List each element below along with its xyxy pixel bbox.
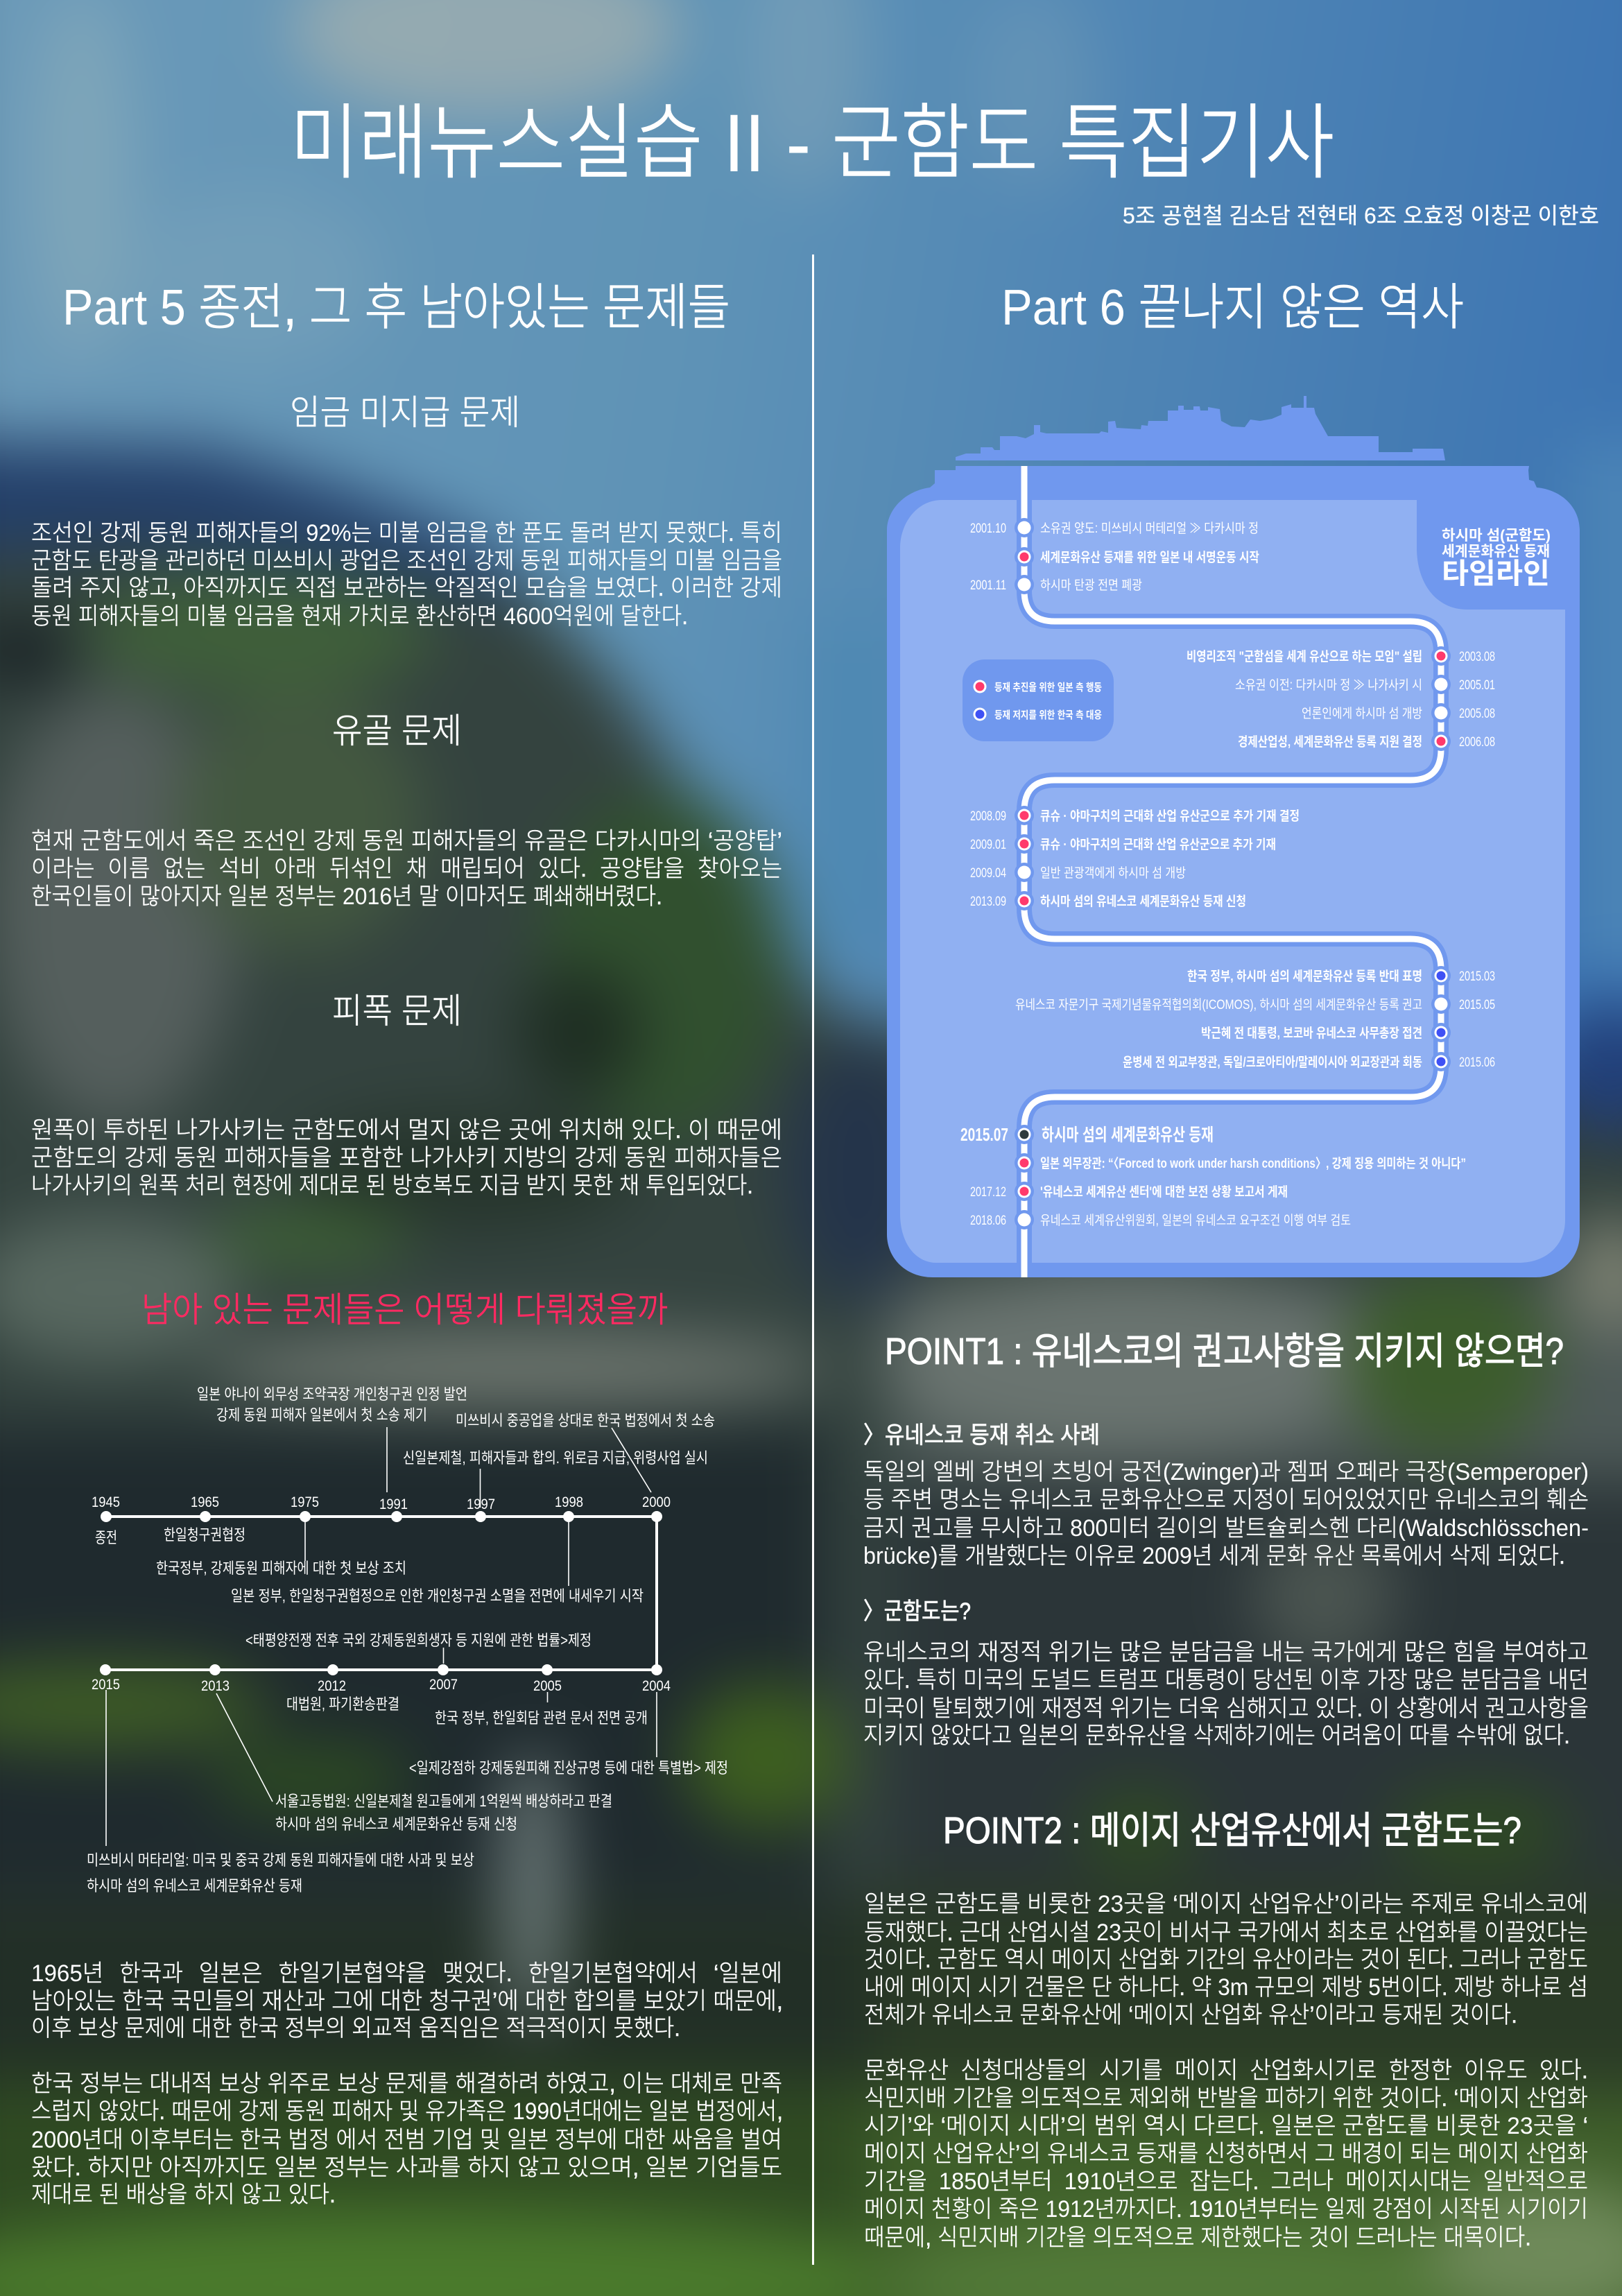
event labels: 하시마 섬의 유네스코 세계문화유산 등재	[87, 1877, 302, 1894]
red heading: 남아 있는 문제들은 어떻게 다뤄졌을까	[141, 1291, 668, 1329]
year labels: 2015	[92, 1677, 120, 1693]
event labels: bold: 큐슈 · 야마구치의 근대화 산업 유산군으로 추가 기재	[1040, 837, 1276, 852]
text block: UNESCO finances: 유네스코의 재정적 위기는 많은 분담금을 내는 국가에게 많은 힘을 부여하고	[863, 1639, 1589, 1666]
event labels: bold: 큐슈 · 야마구치의 근대화 산업 유산군으로 추가 기재 결정	[1040, 809, 1300, 824]
text block: unpaid wages	[31, 520, 782, 630]
panel: part 5 text sections	[31, 393, 782, 1329]
year labels: 2000	[642, 1494, 671, 1510]
date labels: 2009.01	[970, 838, 1006, 852]
subheading: delisting case: 〉유네스코 등재 취소 사례	[863, 1422, 1100, 1449]
subheading: wage: 임금 미지급 문제	[290, 393, 520, 432]
text block: UNESCO finances	[863, 1639, 1589, 1749]
event labels: 서울고등법원: 신일본제철 원고들에게 1억원씩 배상하라고 판결	[275, 1793, 612, 1810]
text block: unpaid wages: 돌려 주지 않고, 아직까지도 직접 보관하는 악질적인 모습을 보였다. 이러한 강제	[31, 575, 782, 601]
text block: period limitation	[864, 2057, 1588, 2251]
date labels: 2015.06	[1459, 1055, 1495, 1070]
year labels: 1975	[291, 1494, 319, 1510]
event labels: bold: 경제산업성, 세계문화유산 등록 지원 결정	[1238, 734, 1422, 750]
heading: point 2: POINT2 : 메이지 산업유산에서 군함도는?	[943, 1810, 1521, 1852]
event labels: bold	[1040, 550, 1466, 1200]
event labels: 종전	[95, 1529, 117, 1546]
event labels: bold: 윤병세 전 외교부장관, 독일/크로아티아/말레이시아 외교장관과 회동	[1123, 1055, 1422, 1070]
route line	[1024, 466, 1441, 1277]
text block: Meiji heritage: 내에 메이지 시기 건물은 단 하나다. 약 3m 규모의 제방 5번이다. 제방 하나로 섬	[864, 1974, 1588, 2001]
text block: period limitation: 메이지 천황이 죽은 1912년까지다. 1910년부터는 일제 강점이 시작된 시기이기	[864, 2196, 1588, 2222]
subheading: radiation: 피폭 문제	[332, 992, 462, 1030]
authors line: 5조 공현철 김소담 전현태 6조 오효정 이창곤 이한호	[1123, 203, 1599, 228]
event labels: regular: 일반 관광객에게 하시마 섬 개방	[1040, 865, 1186, 881]
event labels: bold: 하시마 섬의 유네스코 세계문화유산 등재 신청	[1040, 894, 1246, 909]
text block: period limitation: 기간을 1850년부터 1910년으로 잡는다. 그러나 메이지시대는 일반적으로	[864, 2168, 1588, 2195]
text block: UNESCO finances: 있다. 특히 미국의 도널드 트럼프 대통령이 당선된 이후 가장 많은 분담금을 내던	[863, 1667, 1589, 1693]
text block: period limitation: 때문에, 식민지배 기간을 의도적으로 제한했다는 것이 드러나는 대목이다.	[864, 2225, 1531, 2251]
text block: Meiji heritage: 것이다. 군함도 역시 메이지 산업화 기간의 유산이라는 것이 된다. 그러나 군함도	[864, 1947, 1588, 1973]
text block: 1965 agreement and responses: 제대로 된 배상을 하지 않고 있다.	[31, 2182, 336, 2208]
date labels	[960, 521, 1495, 1228]
date labels: 2005.01	[1459, 678, 1495, 693]
event labels	[87, 1386, 728, 1894]
text block: Meiji heritage: 일본은 군함도를 비롯한 23곳을 ‘메이지 산업유산’이라는 주제로 유네스코에	[864, 1891, 1588, 1917]
event labels: regular	[1015, 521, 1422, 1228]
text block: remains: 이라는 이름 없는 석비 아래 뒤섞인 채 매립되어 있다. 공양탑을 찾아오는	[31, 856, 782, 882]
date labels: 2015.05	[1459, 998, 1495, 1012]
text block: period limitation: 시기’와 ‘메이지 시대’의 범위 역시 다르다. 일본은 군함도를 비롯한 23곳을 ‘	[864, 2113, 1588, 2139]
text block: Meiji heritage: 등재했다. 근대 산업시설 23곳이 비서구 국가에서 최초로 산업화를 이끌었다는	[864, 1919, 1588, 1946]
date labels: 2017.12	[970, 1185, 1006, 1200]
year labels: 1965	[191, 1494, 219, 1510]
year labels: 1998	[555, 1494, 583, 1510]
subheading: Hashima: 〉군함도는?	[863, 1598, 971, 1625]
year labels: 1997	[467, 1496, 495, 1512]
route nodes	[1015, 518, 1451, 1229]
year labels: 2013	[201, 1678, 230, 1694]
date labels: 2006.08	[1459, 735, 1495, 750]
text block: radiation	[31, 1117, 782, 1199]
text block: 1965 agreement and responses: 스럽지 않았다. 때문에 강제 동원 피해자 및 유가족은 1990년대에는 일본 법정에서,	[31, 2098, 783, 2125]
centre divider	[812, 254, 814, 2265]
text block: period limitation: 식민지배 기간을 의도적으로 제외해 반발을 피하기 위한 것이다. ‘메이지 산업화	[864, 2085, 1588, 2112]
year labels: 2012	[318, 1678, 346, 1694]
icon: island silhouette	[956, 396, 1445, 460]
text block: radiation: 나가사키의 원폭 처리 현장에 제대로 된 방호복도 지급 받지 못한 채 투입되었다.	[31, 1173, 753, 1199]
text block: 1965 agreement and responses: 한국 정부는 대내적 보상 위주로 보상 문제를 해결하려 하였고, 이는 대체로 만족	[31, 2071, 782, 2097]
date labels: 2018.06	[970, 1214, 1006, 1228]
date labels: 2001.10	[970, 521, 1006, 536]
year labels: 2005	[533, 1678, 562, 1694]
event labels: <일제강점하 강제동원피해 진상규명 등에 대한 특별법> 제정	[409, 1759, 728, 1777]
text block: unpaid wages: 조선인 강제 동원 피해자들의 92%는 미불 임금을 한 푼도 돌려 받지 못했다. 특히	[31, 520, 782, 546]
heading: part 6: Part 6 끝나지 않은 역사	[1001, 280, 1464, 336]
date labels: 2015.03	[1459, 969, 1495, 984]
event labels: bold: 일본 외무장관: “〈Forced to work under harsh conditions〉, 강제 징용 의미하는 것 아니다”	[1040, 1156, 1466, 1171]
text block: 1965 agreement and responses: 1965년 한국과 일본은 한일기본협약을 맺었다. 한일기본협약에서 ‘일본에	[31, 1960, 782, 1987]
text block: UNESCO finances: 미국이 탈퇴했기에 재정적 위기는 더욱 심해지고 있다. 이 상황에서 권고사항을	[863, 1695, 1589, 1722]
text block: 1965 agreement and responses: 이후 보상 문제에 대한 한국 정부의 외교적 움직임은 적극적이지 못했다.	[31, 2015, 680, 2042]
event labels: 한국정부, 강제동원 피해자에 대한 첫 보상 조치	[156, 1560, 406, 1577]
text block: delisting case: 등 주변 명소는 유네스코 문화유산으로 지정이 되어있었지만 유네스코의 훼손	[863, 1487, 1589, 1513]
year labels	[92, 1494, 671, 1694]
timeline dots	[100, 1511, 662, 1675]
text block: 1965 agreement and responses: 남아있는 한국 국민들의 재산과 그에 대한 청구권’에 대한 합의를 보았기 때문에,	[31, 1988, 783, 2014]
date labels: 2015.07	[960, 1124, 1008, 1145]
event labels: 강제 동원 피해자 일본에서 첫 소송 제기	[216, 1406, 427, 1424]
event labels: 대법원, 파기환송판결	[286, 1695, 399, 1713]
event labels: 일본 야나이 외무성 조약국장 개인청구권 인정 발언	[197, 1386, 467, 1403]
date labels: 2008.09	[970, 809, 1006, 824]
event labels: 신일본제철, 피해자들과 합의. 위로금 지급, 위령사업 실시	[403, 1449, 708, 1467]
text block: radiation: 원폭이 투하된 나가사키는 군함도에서 멀지 않은 곳에 위치해 있다. 이 때문에	[31, 1117, 782, 1143]
event labels: bold: 하시마 섬의 세계문화유산 등재	[1042, 1125, 1214, 1145]
panel: Hashima timeline infographic	[887, 396, 1580, 1277]
panel title	[1442, 528, 1551, 589]
text block: Meiji heritage: 전체가 유네스코 문화유산에 ‘메이지 산업화 유산’이라고 등재된 것이다.	[864, 2002, 1517, 2028]
event labels: regular: 유네스코 세계유산위원회, 일본의 유네스코 요구조건 이행 여부 검토	[1040, 1213, 1351, 1228]
event labels: 미쓰비시 머타리얼: 미국 및 중국 강제 동원 피해자들에 대한 사과 및 보상	[87, 1852, 474, 1869]
event labels: bold: 한국 정부, 하시마 섬의 세계문화유산 등록 반대 표명	[1187, 969, 1422, 984]
text block: 1965 agreement and responses	[31, 1960, 783, 2208]
event labels: bold: 비영리조직 "군함섬을 세계 유산으로 하는 모임" 설립	[1187, 649, 1422, 664]
event labels: bold: 박근혜 전 대통령, 보코바 유네스코 사무총장 접견	[1201, 1026, 1422, 1041]
panel title: 하시마 섬(군함도)	[1442, 528, 1551, 544]
event labels: 일본 정부, 한일청구권협정으로 인한 개인청구권 소멸을 전면에 내세우기 시작	[231, 1587, 644, 1605]
year labels: 1991	[379, 1496, 408, 1512]
text block: period limitation: 메이지 산업유산’의 유네스코 등재를 신청하면서 그 배경이 되는 메이지 산업화	[864, 2141, 1588, 2167]
text block: delisting case	[863, 1459, 1589, 1569]
text block: radiation: 군함도의 강제 동원 피해자들을 포함한 나가사키 지방의 강제 동원 피해자들은	[31, 1145, 782, 1171]
year labels: 2004	[642, 1678, 671, 1694]
year labels: 1945	[92, 1494, 120, 1510]
event labels: bold: '유네스코 세계유산 센터'에 대한 보전 상황 보고서 게재	[1040, 1184, 1288, 1200]
route halo	[1024, 466, 1441, 1277]
event labels: <태평양전쟁 전후 국외 강제동원희생자 등 지원에 관한 법률>제정	[245, 1632, 592, 1649]
text block: Meiji heritage	[864, 1891, 1588, 2028]
date labels: 2013.09	[970, 895, 1006, 909]
timeline track	[106, 1517, 657, 1670]
text block: delisting case: brücke)를 개발했다는 이유로 2009년 세계 문화 유산 목록에서 삭제 되었다.	[863, 1543, 1565, 1569]
panel title: 타임라인	[1442, 558, 1550, 589]
panel title: 세계문화유산 등재	[1442, 544, 1550, 560]
legend: 등재 저지를 위한 한국 측 대응	[994, 709, 1102, 721]
date labels: 2001.11	[970, 578, 1006, 593]
legend: 등재 추진을 위한 일본 측 행동	[994, 682, 1102, 693]
text block: remains	[31, 828, 782, 910]
event labels: regular: 하시마 탄광 전면 폐광	[1040, 578, 1142, 593]
text block: unpaid wages: 동원 피해자들의 미불 임금을 현재 가치로 환산하면 4600억원에 달한다.	[31, 603, 688, 630]
text block: period limitation: 문화유산 신청대상들의 시기를 메이지 산업화시기로 한정한 이유도 있다.	[864, 2057, 1588, 2084]
text block: unpaid wages: 군함도 탄광을 관리하던 미쓰비시 광업은 조선인 강제 동원 피해자들의 미불 임금을	[31, 548, 782, 574]
event labels: 한국 정부, 한일회담 관련 문서 전면 공개	[435, 1709, 648, 1727]
subheading: remains: 유골 문제	[332, 711, 462, 750]
text block: delisting case: 금지 권고를 무시하고 800미터 길이의 발트슐뢰스헨 다리(Waldschlösschen-	[863, 1515, 1589, 1542]
year labels: 2007	[429, 1677, 458, 1693]
event labels: 한일청구권협정	[164, 1526, 245, 1544]
date labels: 2003.08	[1459, 650, 1495, 664]
date labels: 2009.04	[970, 866, 1006, 881]
event labels: 미쓰비시 중공업을 상대로 한국 법정에서 첫 소송	[456, 1412, 715, 1429]
event labels: regular: 소유권 이전: 다카시마 정 ≫ 나가사키 시	[1235, 677, 1422, 693]
date labels: 2005.08	[1459, 707, 1495, 721]
main title: 미래뉴스실습 II - 군함도 특집기사	[290, 98, 1334, 189]
text block: 1965 agreement and responses: 2000년대 이후부터는 한국 법정 에서 전범 기업 및 일본 정부에 대한 싸움을 벌여	[31, 2127, 782, 2153]
event labels: 하시마 섬의 유네스코 세계문화유산 등재 신청	[275, 1815, 517, 1833]
text block: 1965 agreement and responses: 왔다. 하지만 아직까지도 일본 정부는 사과를 하지 않고 있으며, 일본 기업들도	[31, 2155, 782, 2181]
legend	[963, 659, 1114, 741]
event labels: regular: 언론인에게 하시마 섬 개방	[1302, 706, 1422, 721]
panel outer shape	[887, 466, 1580, 1277]
event labels: regular: 소유권 양도: 미쓰비시 머테리얼 ≫ 다카시마 정	[1040, 521, 1259, 536]
text block: delisting case: 독일의 엘베 강변의 츠빙어 궁전(Zwinger)과 젬퍼 오페라 극장(Semperoper)	[863, 1459, 1589, 1485]
heading: part 5: Part 5 종전, 그 후 남아있는 문제들	[62, 280, 730, 336]
panel inner light area	[900, 500, 1565, 1263]
text block: remains: 한국인들이 많아지자 일본 정부는 2016년 말 이마저도 폐쇄해버렸다.	[31, 883, 662, 910]
event labels: bold: 세계문화유산 등재를 위한 일본 내 서명운동 시작	[1040, 550, 1259, 565]
text block: UNESCO finances: 지키지 않았다고 일본의 문화유산을 삭제하기에는 어려움이 따를 수밖에 없다.	[863, 1723, 1570, 1749]
event labels: regular: 유네스코 자문기구 국제기념물유적협의회(ICOMOS), 하시마 섬의 세계문화유산 등록 권고	[1015, 997, 1422, 1012]
text block: remains: 현재 군함도에서 죽은 조선인 강제 동원 피해자들의 유골은 다카시마의 ‘공양탑’	[31, 828, 782, 854]
chart: compensation timeline 1945-2015	[87, 1386, 728, 1894]
leader lines	[106, 1427, 657, 1846]
